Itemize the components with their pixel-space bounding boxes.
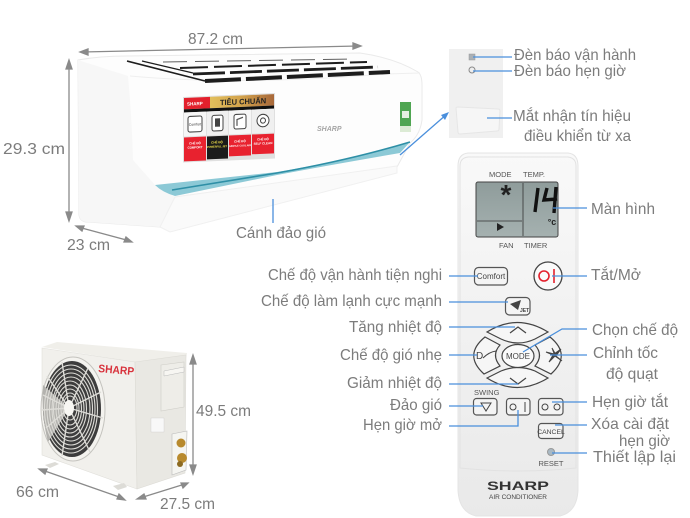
front face (42, 348, 137, 489)
callout: cancel timer: Xóa cài đặt (591, 416, 670, 433)
directional pad: D (476, 351, 483, 362)
outdoor dimension: height (190, 355, 251, 474)
reset button (538, 448, 564, 468)
callout: timer off: Hẹn giờ tắt (592, 392, 669, 411)
callout: reset: Thiết lập lại (593, 449, 676, 466)
feature sticker: Comfort (189, 122, 201, 127)
callout: timer off (552, 392, 669, 411)
cancel button: CANCEL (537, 429, 565, 436)
callout: comfort mode: Chế độ vận hành tiện nghi (268, 267, 442, 284)
feature sticker: SELF CLEAN (254, 141, 272, 146)
timer on button (506, 398, 530, 415)
jet button: JET (520, 308, 529, 314)
remote control: FAN (499, 241, 514, 250)
indoor unit body (78, 53, 422, 227)
flap label: Cánh đảo gió (236, 225, 326, 242)
callout: display (553, 201, 655, 218)
fan grille (41, 357, 105, 461)
outdoor dimension: depth: 27.5 cm (160, 496, 215, 513)
comfort button: Comfort (477, 272, 506, 281)
sticker (151, 418, 164, 432)
directional pad: MODE (506, 352, 530, 361)
timer off button (538, 398, 563, 415)
flap (160, 166, 397, 232)
callout: temperature down: Giảm nhiệt độ (347, 375, 442, 392)
feature sticker: POWERFUL JET (207, 144, 227, 149)
feature sticker: CHẾ ĐỘ (211, 139, 223, 145)
temperature up (487, 322, 548, 343)
LCD display (476, 179, 558, 237)
outdoor unit (41, 342, 187, 490)
feature sticker: COMFORT (187, 145, 203, 150)
remote control: TEMP. (523, 170, 545, 179)
reset button: RESET (538, 459, 564, 468)
dimension: height: 29.3 cm (3, 141, 65, 158)
callout: temperature up: Tăng nhiệt độ (349, 319, 442, 336)
outdoor dimension: width: 66 cm (16, 484, 59, 501)
comfort button (474, 268, 508, 285)
dimension: depth: 23 cm (67, 237, 110, 254)
indoor unit (78, 53, 422, 232)
callout: display: Màn hình (591, 201, 655, 218)
callout: power (552, 265, 641, 284)
outdoor dimension: height: 49.5 cm (196, 403, 251, 420)
blue accent strip (155, 142, 410, 196)
cancel button (537, 424, 565, 438)
gentle wind (474, 337, 500, 374)
dimension: width: 87.2 cm (188, 31, 243, 48)
power button (534, 262, 562, 290)
callout: mode select (523, 322, 678, 352)
feet (45, 462, 127, 490)
SHARP logo: SHARP (98, 363, 135, 378)
top face (42, 342, 187, 362)
callout arrow to detail panel (400, 112, 449, 155)
LCD display: * (501, 179, 512, 210)
service panel (161, 362, 184, 411)
callout: mode select: Chọn chế độ (592, 322, 678, 339)
temperature down (487, 368, 548, 388)
callout: fan speed: Chỉnh tốc (593, 345, 658, 362)
feature sticker: CHẾ ĐỘ (189, 140, 201, 146)
callout: swing (390, 397, 483, 414)
feature sticker: TIÊU CHUẨN (220, 96, 266, 107)
display labels: MODE (489, 170, 512, 179)
callout: swing: Đảo gió (390, 397, 442, 414)
detail panel: indicator lights (449, 49, 503, 138)
label: operation light: Đèn báo vận hành (514, 47, 636, 64)
air vents (127, 59, 390, 81)
callout: cancel timer (555, 416, 670, 450)
remote control (458, 153, 578, 516)
timer light (469, 67, 475, 73)
feature sticker: GENTLE COOL AIR (229, 144, 251, 148)
callout: power: Tắt/Mở (591, 265, 641, 284)
feature sticker: CHẾ ĐỘ (257, 136, 269, 142)
receiver window (456, 107, 500, 134)
dimension: width (80, 31, 361, 55)
energy label (400, 102, 411, 132)
callout: jet mode: Chế độ làm lạnh cực mạnh (261, 293, 442, 310)
operation light (469, 54, 475, 60)
remote branding: SHARP (487, 479, 549, 493)
mode button (502, 344, 534, 368)
remote branding (487, 479, 549, 501)
LCD display: °c (548, 217, 556, 227)
swing button: SWING (474, 388, 500, 397)
label: remote receiver: Mắt nhận tín hiệu (513, 106, 631, 125)
side face (135, 355, 186, 489)
label: remote receiver (487, 106, 631, 145)
callout: fan speed (550, 345, 659, 383)
label: timer light: Đèn báo hẹn giờ (514, 63, 626, 80)
callout: gentle wind: Chế độ gió nhẹ (340, 347, 442, 364)
feature sticker: SHARP (187, 101, 203, 107)
callout: fan speed: độ quạt (606, 366, 659, 383)
flap label (236, 199, 326, 242)
callout: timer on (363, 410, 518, 434)
brand logo: SHARP (317, 126, 342, 133)
label: remote receiver: điều khiển từ xa (524, 127, 631, 145)
callout: timer on: Hẹn giờ mở (363, 417, 442, 434)
outdoor dimension: width (16, 469, 125, 501)
outdoor dimension: depth (137, 483, 215, 513)
dimension: depth (67, 226, 132, 254)
brass valves (172, 431, 187, 475)
remote control: TIMER (524, 241, 548, 250)
dimension: height (3, 60, 72, 221)
feature sticker: CHẾ ĐỘ (234, 138, 246, 144)
swing button (474, 388, 500, 415)
directional pad (474, 322, 562, 388)
callout: cancel timer: hẹn giờ (619, 433, 670, 450)
remote branding: AIR CONDITIONER (489, 494, 547, 501)
jet button (506, 298, 530, 315)
feature sticker (183, 93, 275, 163)
callout: reset (552, 449, 676, 466)
remote body (458, 153, 578, 516)
fan speed (535, 337, 561, 374)
